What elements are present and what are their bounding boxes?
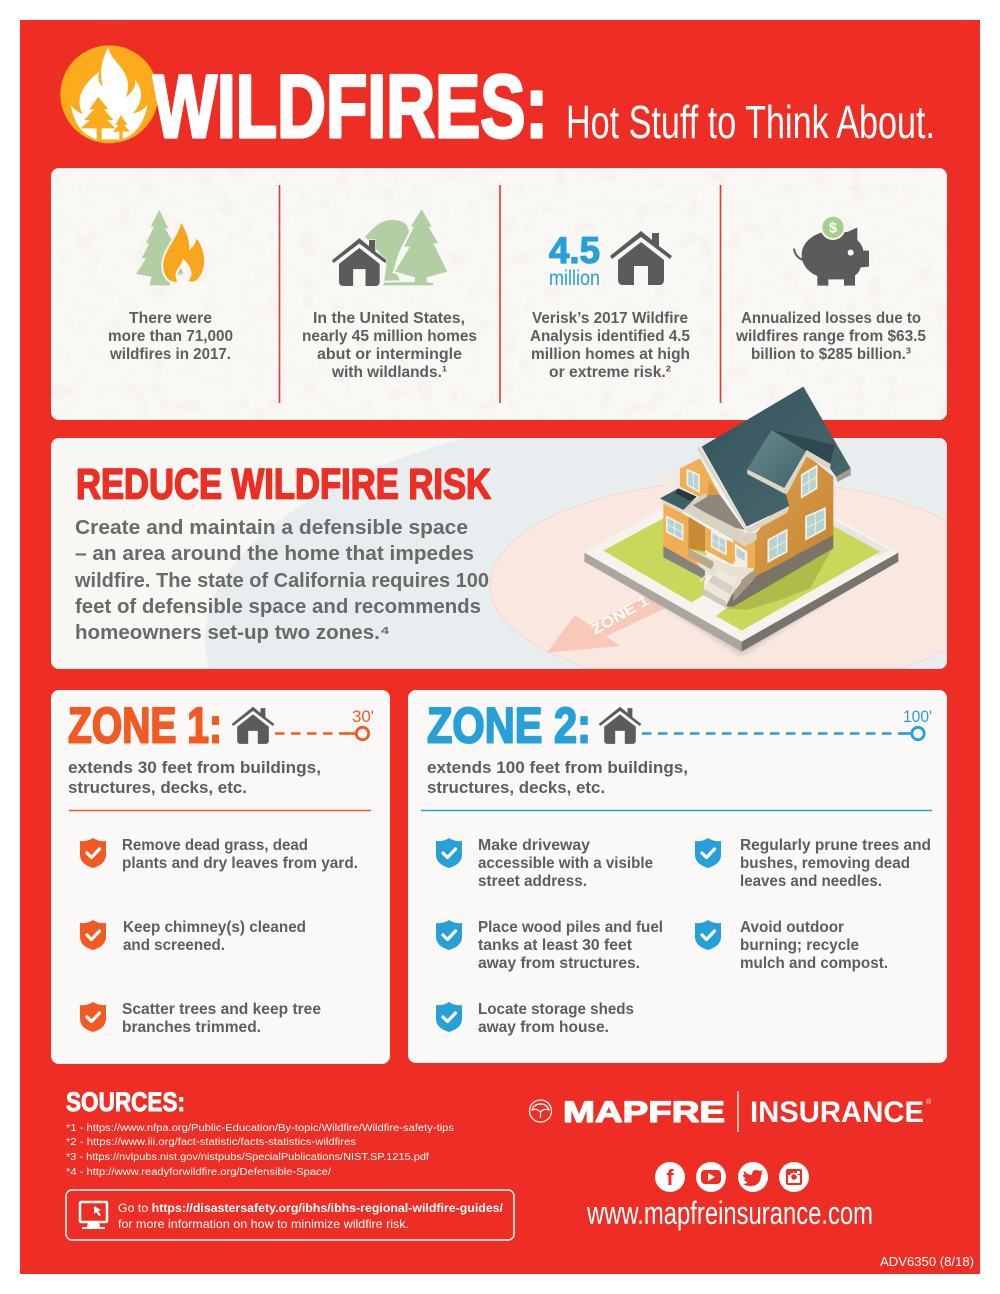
sources: *2 - https://www.iii.org/fact-statistic/facts-statistics-wildfires [66, 1136, 356, 1148]
zone 2 distance marker: 100 feet: 100' [903, 707, 932, 726]
defensible space paragraph: feet of defensible space and recommends [75, 595, 481, 618]
item: storage sheds [478, 1001, 634, 1036]
icon: blue shield 2 [436, 920, 462, 950]
item: trees [122, 1001, 321, 1036]
zone 1 description: extends 30 feet from buildings, [68, 758, 321, 777]
icon: orange shield 1 [80, 838, 106, 868]
item: outdoor burning: burning; recycle [740, 937, 859, 954]
panel: statistics [51, 168, 947, 420]
item: chimney: and screened. [123, 937, 225, 954]
item: prune trees: Regularly prune trees and [740, 837, 931, 854]
callout: more information [66, 1190, 514, 1240]
icon: computer monitor [80, 1202, 107, 1229]
item: dead grass [122, 837, 358, 872]
defensible space paragraph: Create and maintain a defensible space [75, 516, 468, 539]
stat 1 text: There were [129, 310, 212, 327]
icon: orange shield 3 [80, 1002, 106, 1032]
document code: ADV6350 (8/18) [880, 1254, 974, 1269]
item: outdoor burning: mulch and compost. [740, 955, 888, 972]
MAPFRE Insurance logo [530, 1091, 932, 1132]
stat 3 text: or extreme risk.² [549, 364, 671, 381]
item: trees: Scatter trees and keep tree [122, 1001, 321, 1018]
icon: twitter [738, 1162, 768, 1192]
zone 2 checklist [436, 837, 931, 1036]
sources: SOURCES: [66, 1087, 185, 1117]
zone 1 description [68, 758, 321, 797]
header logo: flame and trees [60, 45, 158, 143]
item: outdoor burning [740, 919, 888, 972]
icon: blue shield 1 [436, 838, 462, 868]
MAPFRE Insurance logo: MAPFRE [563, 1096, 725, 1129]
item: storage sheds: away from house. [478, 1019, 609, 1036]
MAPFRE Insurance logo: INSURANCE [750, 1096, 924, 1129]
zone 1 description: structures, decks, etc. [68, 778, 247, 797]
stat 1 text [108, 310, 233, 363]
stat 4 text: billion to $285 billion.³ [751, 346, 911, 363]
stat 3 text: million homes at high [531, 346, 690, 363]
stat 3 text: Analysis identified 4.5 [530, 328, 690, 345]
zone 2 description: extends 100 feet from buildings, [427, 758, 688, 777]
icon: 4.5 million homes: 4.5 [549, 230, 600, 271]
column dividers [280, 185, 720, 403]
item: driveway: Make driveway [478, 837, 590, 854]
heading: reduce wildfire risk: REDUCE WILDFIRE RISK [76, 460, 491, 508]
icon: blue shield 5 [695, 920, 721, 950]
stat 3 text: Verisk’s 2017 Wildfire [532, 310, 688, 327]
zone 2 description: structures, decks, etc. [427, 778, 605, 797]
zone 2 description [427, 758, 688, 797]
porch and steps [688, 548, 755, 588]
arrow: zone 1 direction [547, 593, 665, 653]
heading: zone 1: ZONE 1: [68, 698, 222, 754]
icon: facebook: f [666, 1165, 674, 1190]
icon: 4.5 million homes: million [549, 267, 600, 290]
item: storage sheds: Locate storage sheds [478, 1001, 634, 1018]
icon: house with trees [332, 209, 447, 286]
MAPFRE Insurance logo: ® [926, 1098, 932, 1106]
zone 1 distance marker: 30 feet [275, 707, 374, 740]
stat 2 text: nearly 45 million homes [302, 328, 477, 345]
sources: *1 - https://www.nfpa.org/Public-Education/By-topic/Wildfire/Wildfire-safety-tips [66, 1122, 454, 1134]
icon: instagram [779, 1162, 809, 1192]
item: prune trees: leaves and needles. [740, 873, 882, 890]
illustration: isometric house [547, 387, 898, 657]
icon: blue shield 3 [436, 1002, 462, 1032]
icon: tree and flame [136, 210, 204, 285]
item: dead grass: Remove dead grass, dead [122, 837, 308, 854]
zone 1 distance marker: 30 feet: 30' [352, 707, 374, 726]
callout text: Go to https://disastersafety.org/ibhs/ibhs-regional-wildfire-guides/ [118, 1201, 504, 1215]
panel: zone 1 [51, 690, 390, 1064]
roofs [692, 495, 745, 530]
stat 4 text: Annualized losses due to [741, 310, 921, 327]
title [153, 56, 935, 156]
item: wood piles [478, 919, 663, 972]
stat 4 text [735, 310, 926, 363]
item: chimney [123, 919, 306, 954]
icon: piggy bank: $ [829, 221, 837, 237]
stat 1 text: more than 71,000 [108, 328, 233, 345]
sources: *3 - https://nvlpubs.nist.gov/nistpubs/SpecialPublications/NIST.SP.1215.pdf [66, 1151, 429, 1163]
main walls [755, 455, 833, 577]
defensible space paragraph: homeowners set-up two zones.⁴ [75, 621, 390, 644]
item: dead grass: plants and dry leaves from yard. [122, 855, 358, 872]
stat 2 text: with wildlands.¹ [331, 364, 447, 381]
icon: 4.5 million homes [549, 230, 672, 290]
panel: zone 2 [408, 690, 947, 1063]
stat 3 text [530, 310, 690, 381]
defensible space paragraph [74, 516, 489, 644]
heading: zone 2: ZONE 2: [427, 698, 591, 754]
icon: orange shield 2 [80, 920, 106, 950]
title: WILDFIRES: [153, 56, 548, 156]
icon: facebook [655, 1162, 685, 1192]
icon: piggy bank [794, 215, 869, 286]
defensible space paragraph: – an area around the home that impedes [75, 542, 474, 565]
stat 2 text [302, 310, 477, 381]
defensible space paragraph: wildfire. The state of California requires 100 [74, 569, 489, 592]
zone 2 distance marker: 100 feet [642, 707, 932, 740]
item: driveway [478, 837, 653, 890]
item: outdoor burning: Avoid outdoor [740, 919, 844, 936]
item: wood piles: Place wood piles and fuel [478, 919, 663, 936]
item: wood piles: away from structures. [478, 955, 640, 972]
arrow: zone 1 direction: ZONE 1 [589, 593, 652, 638]
zone 1 checklist [80, 837, 358, 1036]
windows [667, 466, 825, 563]
social media icons [655, 1162, 809, 1192]
sources: *4 - http://www.readyforwildfire.org/Defensible-Space/ [66, 1166, 331, 1178]
item: chimney: Keep chimney(s) cleaned [123, 919, 306, 936]
icon: blue shield 4 [695, 838, 721, 868]
callout text [118, 1201, 504, 1231]
stat 1 text: wildfires in 2017. [109, 346, 231, 363]
panel: reduce wildfire risk [51, 438, 947, 669]
item: prune trees: bushes, removing dead [740, 855, 910, 872]
stat 2 text: In the United States, [313, 310, 465, 327]
website address: www.mapfreinsurance.com [586, 1195, 873, 1231]
item: wood piles: tanks at least 30 feet [478, 937, 633, 954]
item: driveway: street address. [478, 873, 587, 890]
stat 2 text: abut or intermingle [317, 346, 462, 363]
icon: youtube [696, 1162, 726, 1192]
stat 4 text: wildfires range from $63.5 [735, 328, 926, 345]
item: prune trees [740, 837, 931, 890]
zone rings behind the house [205, 438, 947, 669]
item: driveway: accessible with a visible [478, 855, 653, 872]
item: trees: branches trimmed. [122, 1019, 261, 1036]
sources [66, 1087, 454, 1178]
callout text: for more information on how to minimize wildfire risk. [118, 1217, 409, 1231]
